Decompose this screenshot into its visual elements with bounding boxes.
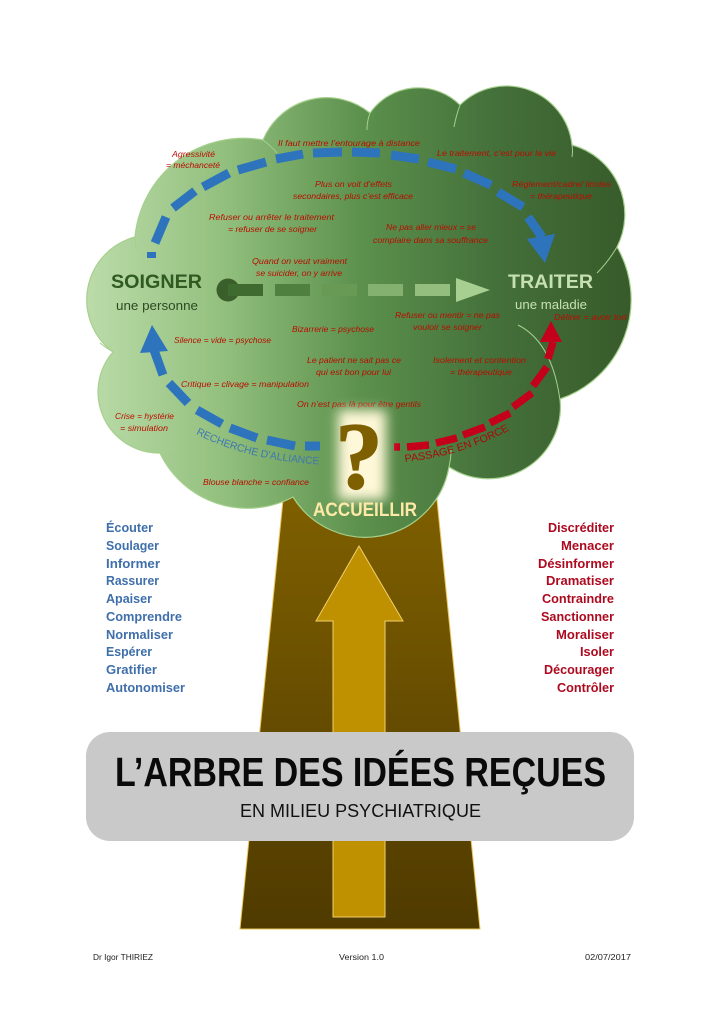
list: positive attitudes: Normaliser [106,627,173,642]
received ideas in the crown: se suicider, on y arrive [256,268,342,278]
subtitle: EN MILIEU PSYCHIATRIQUE [240,801,481,821]
label: traiter une maladie: une maladie [515,297,587,312]
list: negative attitudes: Contrôler [557,680,614,695]
tree crown [87,86,631,537]
list: positive attitudes: Gratifier [106,662,157,677]
label: soigner une personne [111,272,202,313]
received ideas in the crown [115,138,628,487]
received ideas in the crown: = méchanceté [166,160,220,170]
received ideas in the crown: secondaires, plus c’est efficace [293,191,413,201]
received ideas in the crown: Le traitement, c’est pour la vie [437,148,556,158]
central green dashed arrow [216,278,490,302]
list: negative attitudes: Décourager [544,662,614,677]
list: positive attitudes: Écouter [106,520,153,535]
received ideas in the crown: Critique = clivage = manipulation [181,379,309,389]
label: traiter une maladie: TRAITER [508,272,593,293]
received ideas in the crown: Réglement/cadre/ limites [512,179,612,189]
list: positive attitudes: Autonomiser [106,680,185,695]
received ideas in the crown: qui est bon pour lui [316,367,392,377]
blue arc: soigner to traiter [152,152,555,263]
received ideas in the crown: Isolement et contention [433,355,526,365]
received ideas in the crown: = refuser de se soigner [228,224,318,234]
received ideas in the crown: Silence = vide = psychose [174,335,271,345]
list: negative attitudes: Isoler [580,644,614,659]
red arc: passage en force [394,321,562,447]
list: negative attitudes: Sanctionner [541,609,614,624]
received ideas in the crown: Plus on voit d’effets [315,179,393,189]
received ideas in the crown: Blouse blanche = confiance [203,477,309,487]
list: negative attitudes: Dramatiser [546,573,614,588]
icon: question mark: ? [335,403,383,509]
list: positive attitudes: Espérer [106,644,152,659]
list: positive attitudes: Comprendre [106,609,182,624]
received ideas in the crown: vouloir se soigner [413,322,483,332]
footer [93,952,631,962]
list: positive attitudes: Apaiser [106,591,152,606]
list: negative attitudes [538,520,614,695]
list: positive attitudes: Soulager [106,538,159,553]
list: negative attitudes: Discréditer [548,520,614,535]
label: accueillir: ACCUEILLIR [313,500,417,521]
list: negative attitudes: Menacer [561,538,614,553]
footer: Version 1.0 [339,952,384,962]
received ideas in the crown: Le patient ne sait pas ce [307,355,401,365]
blue arc: recherche d'alliance [140,325,320,446]
received ideas in the crown: Refuser ou mentir = ne pas [395,310,501,320]
label: traiter une maladie [508,272,593,312]
curved label: recherche d'alliance: RECHERCHE D’ALLIANCE [196,428,319,464]
received ideas in the crown: Il faut mettre l’entourage à distance [278,138,420,148]
tree trunk [240,490,480,929]
glow behind question mark [338,410,386,500]
received ideas in the crown: = thérapeutique [530,191,592,201]
title: L’ARBRE DES IDÉES REÇUES [115,749,606,795]
received ideas in the crown: Quand on veut vraiment [252,256,348,266]
received ideas in the crown: complaire dans sa souffrance [373,235,488,245]
footer: 02/07/2017 [585,952,631,962]
list: positive attitudes [106,520,185,695]
received ideas in the crown: Délirer = avoir tort [554,312,628,322]
upward arrow in trunk [316,546,403,917]
curved label: passage en force: PASSAGE EN FORCE [405,424,509,462]
list: positive attitudes: Informer [106,556,160,571]
received ideas in the crown: Crise = hystérie [115,411,174,421]
received ideas in the crown: Refuser ou arrêter le traitement [209,212,335,222]
received ideas in the crown: Bizarrerie = psychose [292,324,374,334]
list: negative attitudes: Désinformer [538,556,614,571]
list: negative attitudes: Contraindre [542,591,614,606]
received ideas in the crown: Agressivité [171,149,215,159]
received ideas in the crown: Ne pas aller mieux = se [386,222,476,232]
list: positive attitudes: Rassurer [106,573,159,588]
label: soigner une personne: SOIGNER [111,272,202,293]
title panel [86,732,634,841]
footer: Dr Igor THIRIEZ [93,952,153,962]
received ideas in the crown: On n’est pas là pour être gentils [297,399,422,409]
received ideas in the crown: = thérapeutique [450,367,512,377]
list: negative attitudes: Moraliser [556,627,614,642]
received ideas in the crown: = simulation [120,423,168,433]
label: soigner une personne: une personne [116,298,198,313]
